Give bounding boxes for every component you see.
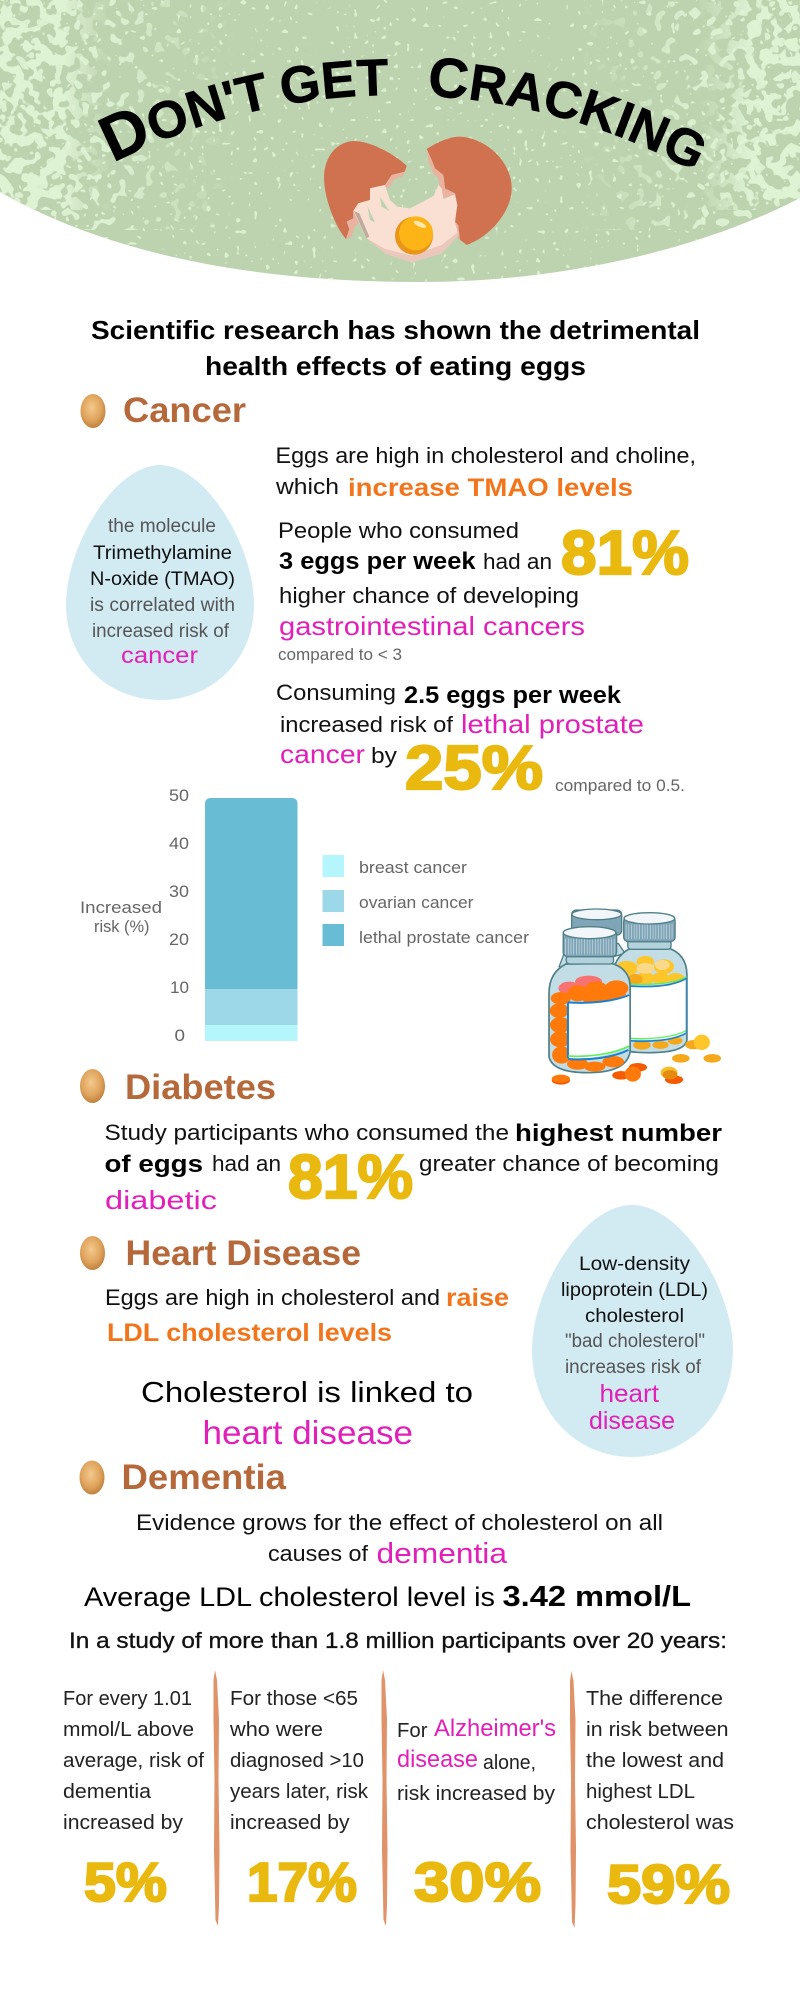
stat column 4: cholesterol was [586, 1812, 734, 1834]
egg white [353, 185, 458, 262]
text: TMAO levels: increase TMAO levels [348, 474, 633, 502]
stat column 1: mmol/L above [63, 1719, 194, 1741]
bar chart: increased risk: risk (%) [94, 918, 150, 936]
text: average LDL: Average LDL cholesterol level is [84, 1582, 495, 1612]
text: prostate cancer stat: cancer [280, 739, 365, 769]
title [98, 58, 704, 166]
subtitle [91, 315, 700, 381]
heading: cancer: Cancer [123, 391, 246, 430]
heading: dementia: Dementia [122, 1458, 287, 1497]
text: diabetes stat: diabetic [105, 1185, 217, 1215]
text: diabetes stat: of eggs [104, 1151, 203, 1178]
text: evidence: causes of [268, 1541, 369, 1566]
back bottle [559, 943, 625, 970]
stat column 1 [63, 1688, 204, 1913]
callout egg: LDL: Low-density [579, 1254, 691, 1275]
bar chart: increased risk: 40 [169, 835, 189, 853]
section: heart disease [80, 1205, 733, 1457]
stat column 4: the lowest and [586, 1750, 724, 1772]
stat column 4: The difference [586, 1688, 723, 1710]
stat column 1: For every 1.01 [63, 1688, 192, 1710]
green curved background [0, 0, 800, 282]
text: evidence: dementia [376, 1538, 508, 1570]
title: CRACKING [430, 58, 704, 166]
stat column 2 [229, 1688, 369, 1913]
stat column 3: For [397, 1720, 428, 1742]
icon: egg [80, 1236, 105, 1270]
stat column 4: in risk between [586, 1719, 728, 1741]
header banner [0, 0, 800, 282]
text: average LDL: 3.42 mmol/L [502, 1581, 691, 1613]
speckle texture [0, 0, 800, 285]
left shell [324, 141, 407, 239]
text: gastrointestinal cancers stat: had an [483, 549, 552, 574]
right shell [427, 137, 512, 245]
subtitle: Scientific research has shown the detrimental [91, 315, 700, 345]
callout egg: TMAO: increased risk of [92, 621, 230, 642]
left bottle [549, 963, 630, 1073]
stat column 2: who were [229, 1719, 323, 1741]
stat column 1: increased by [63, 1812, 183, 1834]
callout egg: TMAO [66, 465, 254, 700]
callout egg: TMAO: cancer [121, 642, 198, 668]
text: evidence: Evidence grows for the effect of cholesterol on all [136, 1510, 663, 1535]
callout egg: TMAO: is correlated with [90, 595, 235, 616]
text: TMAO levels: Eggs are high in cholesterol and choline, [276, 443, 696, 468]
text: average LDL [84, 1581, 691, 1613]
bar chart: increased risk: 50 [169, 787, 189, 805]
callout egg: LDL: increases risk of [565, 1357, 702, 1378]
stat column 2: increased by [230, 1812, 350, 1834]
heading: diabetes: Diabetes [125, 1068, 276, 1107]
callout egg: TMAO: Trimethylamine [93, 543, 232, 564]
stat column 4 [586, 1688, 734, 1915]
text: TMAO levels [275, 443, 696, 502]
stat column 1: dementia [63, 1781, 152, 1803]
text: prostate cancer stat [276, 680, 685, 803]
text: prostate cancer stat: by [371, 743, 397, 768]
bar chart: increased risk [80, 787, 530, 1045]
callout egg: LDL: lipoprotein (LDL) [561, 1280, 708, 1301]
divider [382, 1670, 388, 1926]
title: DON'T GET [98, 58, 388, 162]
text: gastrointestinal cancers stat: compared to < 3 [278, 646, 402, 664]
stat column 3: disease [397, 1746, 478, 1773]
callout egg: TMAO: the molecule [108, 516, 216, 537]
text: study size: In a study of more than 1.8 million participants over 20 years: [69, 1628, 727, 1653]
icon: egg [80, 1069, 105, 1103]
text: gastrointestinal cancers stat: 3 eggs per week [279, 548, 476, 575]
stat column 3: Alzheimer's [434, 1715, 556, 1742]
divider [214, 1670, 220, 1926]
callout egg: LDL: disease [589, 1407, 675, 1435]
text: TMAO levels: which [275, 474, 339, 499]
inner shell edges [346, 166, 407, 239]
icon: pill bottles [549, 909, 721, 1085]
bar chart: increased risk: Increased [80, 899, 162, 917]
section: dementia [63, 1458, 734, 1928]
text: gastrointestinal cancers stat [278, 518, 689, 664]
text: diabetes stat: had an [212, 1151, 281, 1176]
bar chart: increased risk: 0 [174, 1027, 185, 1045]
chart legend [322, 855, 530, 947]
text: cholesterol link: heart disease [202, 1414, 413, 1451]
text: LDL levels: raise [446, 1284, 509, 1312]
chart legend: lethal prostate cancer [359, 929, 530, 947]
text: diabetes stat: greater chance of becoming [419, 1151, 719, 1176]
callout egg: LDL: cholesterol [585, 1306, 684, 1327]
stat column 2: 17% [247, 1851, 357, 1913]
stat column 3 [397, 1715, 556, 1913]
text: LDL levels: LDL cholesterol levels [107, 1319, 392, 1347]
stat column 1: 5% [84, 1851, 167, 1913]
text: diabetes stat: highest number [515, 1120, 722, 1147]
text: prostate cancer stat: 2.5 eggs per week [404, 682, 622, 709]
text: prostate cancer stat: increased risk of [280, 712, 454, 737]
stat column 4: 59% [607, 1853, 730, 1915]
text: evidence [136, 1510, 663, 1570]
section: cancer [66, 391, 721, 1085]
stat column 3: 30% [414, 1851, 541, 1913]
text: gastrointestinal cancers stat: People who consumed [278, 518, 519, 543]
stat column 2: For those <65 [230, 1688, 358, 1710]
icon: egg [80, 394, 106, 428]
text: diabetes stat [104, 1120, 722, 1215]
loose pills [552, 1035, 721, 1085]
bar chart: increased risk: 10 [170, 979, 189, 997]
stat column 1: average, risk of [63, 1750, 204, 1772]
text: prostate cancer stat: Consuming [276, 680, 396, 705]
bar chart: increased risk: 20 [169, 931, 189, 949]
text: prostate cancer stat: 25% [405, 734, 543, 803]
left bottle label [568, 993, 629, 1059]
icon: cracked egg [324, 137, 512, 262]
callout egg: LDL: "bad cholesterol" [565, 1331, 705, 1352]
stat column 4: highest LDL [586, 1781, 695, 1803]
section: diabetes [80, 1068, 722, 1215]
text: cholesterol link [141, 1377, 473, 1451]
callout egg: TMAO: N-oxide (TMAO) [90, 569, 235, 590]
text: prostate cancer stat: lethal prostate [461, 709, 644, 739]
subtitle: health effects of eating eggs [205, 351, 586, 381]
heading: heart disease: Heart Disease [126, 1234, 361, 1273]
text: gastrointestinal cancers stat: gastrointestinal cancers [279, 611, 585, 641]
chart legend: breast cancer [359, 859, 468, 877]
text: LDL levels [105, 1284, 509, 1347]
stat column 3: alone, [483, 1752, 536, 1774]
text: LDL levels: Eggs are high in cholesterol and [105, 1285, 440, 1310]
callout egg: LDL [532, 1205, 733, 1457]
text: gastrointestinal cancers stat: higher chance of developing [279, 583, 579, 608]
icon: egg [80, 1460, 104, 1494]
text: diabetes stat: 81% [288, 1143, 413, 1212]
right bottle label [628, 979, 687, 1039]
bar chart: increased risk: 30 [169, 883, 189, 901]
yolk [395, 217, 433, 255]
callout egg: LDL: heart [600, 1380, 659, 1408]
text: diabetes stat: Study participants who consumed the [104, 1120, 509, 1145]
right bottle [613, 948, 687, 1053]
stat column 2: diagnosed >10 [230, 1750, 364, 1772]
chart legend: ovarian cancer [359, 894, 474, 912]
text: gastrointestinal cancers stat: 81% [561, 519, 689, 588]
text: cholesterol link: Cholesterol is linked to [141, 1377, 473, 1409]
stat column 2: years later, risk [230, 1781, 369, 1803]
stat column 3: risk increased by [397, 1783, 555, 1805]
divider [570, 1671, 576, 1928]
text: prostate cancer stat: compared to 0.5. [555, 777, 685, 795]
